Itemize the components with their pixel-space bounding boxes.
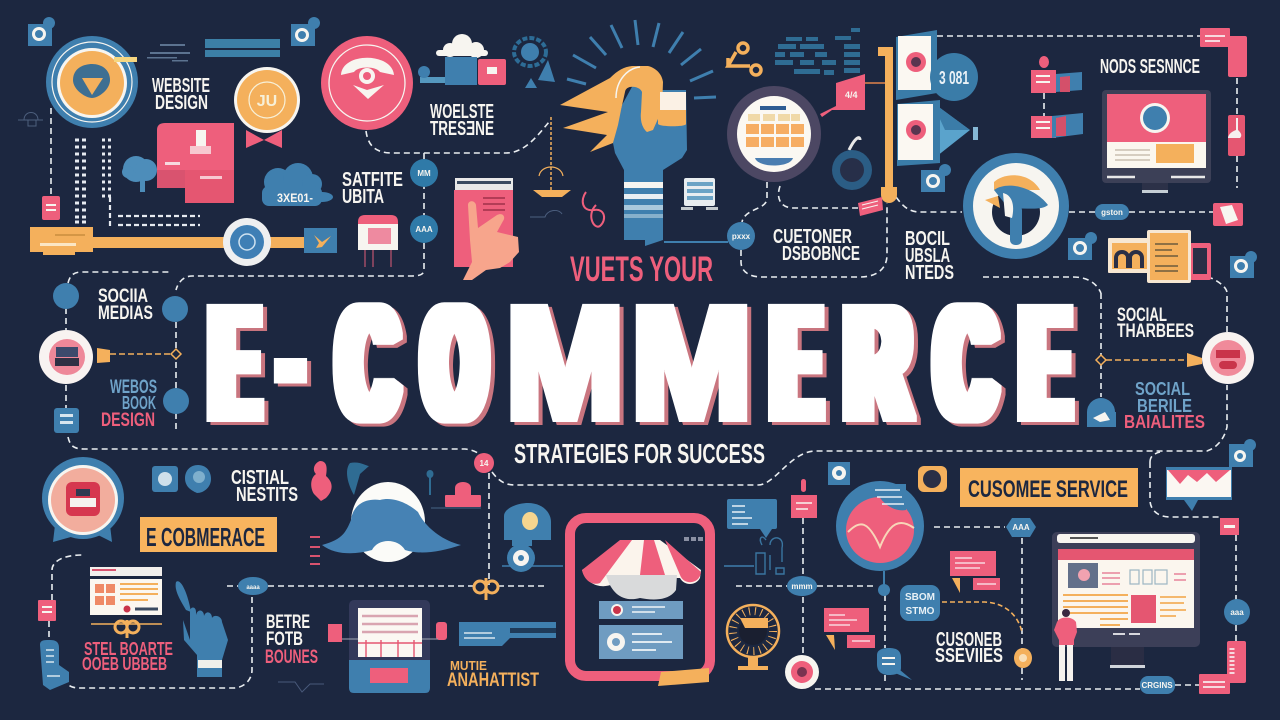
icon: tablet xyxy=(328,600,447,693)
heading: website design xyxy=(152,75,210,114)
blue text card xyxy=(900,585,940,621)
icon: orange badge: JU xyxy=(257,93,277,110)
blue pill node right: AAA xyxy=(1012,523,1030,532)
main title: E xyxy=(212,273,257,454)
small arc icon xyxy=(530,210,562,217)
icon: blue bars xyxy=(205,39,280,57)
heading: woelste tresene xyxy=(430,101,494,140)
main title: E xyxy=(1022,273,1068,454)
heading: betre foth bounes: BOUNES xyxy=(265,647,318,668)
heading: satfite ubita: UBITA xyxy=(342,186,384,208)
icon: blue hand xyxy=(176,581,228,677)
icon: gear and figure xyxy=(514,38,555,88)
icon: round calendar xyxy=(727,86,821,182)
pink tag and blue phone xyxy=(38,600,69,690)
orange text: mutie anahatist: MUTIE xyxy=(450,658,487,673)
icon: pink documents xyxy=(157,123,234,203)
pink text: stel boarte: OOEB UBBEB xyxy=(82,654,167,674)
heading: customer dsbobnce: CUETONER xyxy=(773,226,852,248)
left node: social medias: MEDIAS xyxy=(98,303,153,324)
icon: monitor xyxy=(1102,90,1211,193)
icon pair: brain and drop xyxy=(152,465,211,493)
icon: orange wheel xyxy=(727,605,779,670)
pink message group xyxy=(824,608,875,650)
icon: webcam xyxy=(504,503,551,572)
blue pill xyxy=(1095,204,1129,220)
heading: cusoneb sseviies: CUSONEB xyxy=(936,629,1002,651)
left medallion xyxy=(39,330,110,384)
orange node xyxy=(1014,648,1032,668)
right medallion xyxy=(1096,332,1254,384)
main title: M xyxy=(506,273,624,454)
icon: storefront xyxy=(570,518,710,686)
left text: webos design: WEBOS xyxy=(110,377,157,398)
pink pin tag xyxy=(791,479,817,518)
main title: E xyxy=(773,273,819,454)
heading: woelste tresene: WOELSTE xyxy=(430,101,494,123)
orange label: e commerce: E COBMERACE xyxy=(146,522,265,552)
dot grid xyxy=(75,140,200,226)
heading: satfite ubita xyxy=(342,169,403,208)
orange upright bar xyxy=(878,47,897,203)
pink text: stel boarte xyxy=(82,639,173,674)
node circles: MM xyxy=(417,169,431,178)
heading: website design: WEBSITE xyxy=(152,75,210,97)
blue pill: gston xyxy=(1101,208,1123,217)
main title: C xyxy=(339,272,396,455)
icon: orange robot xyxy=(728,43,761,75)
heading: cistial nestits: CISTIAL xyxy=(231,467,289,489)
blue text card: SBOM xyxy=(905,592,935,603)
pink message group right xyxy=(950,551,1000,593)
blue circle node: aaa xyxy=(1230,608,1244,617)
blue node: pxxx xyxy=(732,232,751,241)
blue pill node: mmm xyxy=(791,582,813,591)
blue pill node right xyxy=(1006,518,1036,537)
subtitle: STRATEGIES FOR SUCCESS xyxy=(514,438,765,469)
heading: vuets your: VUETS YOUR xyxy=(570,250,713,289)
icon: website design ring xyxy=(46,36,138,128)
puzzle icon xyxy=(1229,439,1256,467)
puzzle icon xyxy=(1068,232,1097,260)
icon: cloud store xyxy=(418,34,506,85)
heading: betre foth bounes: BETRE xyxy=(266,612,310,633)
heading: social data nteds xyxy=(905,228,954,284)
blue pill node xyxy=(787,576,817,596)
orange text: mutie anahatist: ANAHATTIST xyxy=(447,670,539,691)
left text: webos design xyxy=(101,349,189,431)
orange knot node xyxy=(474,578,498,600)
bottom left medallion xyxy=(42,457,124,542)
right blue blob xyxy=(1087,398,1116,427)
pink figure and blue figure xyxy=(311,461,369,501)
pie circle xyxy=(836,481,924,571)
icon: blue cloud tree xyxy=(122,156,157,192)
orange round icon xyxy=(918,466,947,492)
pink square xyxy=(1213,203,1243,226)
heading: woelste tresene: TRESƎNE xyxy=(430,118,494,140)
pink tag xyxy=(42,196,60,220)
blue pill bottom right: CRGINS xyxy=(1141,681,1173,690)
node circles: AAA xyxy=(415,225,433,234)
heading: cusoneb sseviies xyxy=(935,629,1003,667)
icon: puzzle top centre xyxy=(291,17,320,46)
pink corner tag xyxy=(1200,28,1247,77)
icon: moon and mountains xyxy=(310,482,461,564)
icon: big ring hammer xyxy=(963,153,1069,259)
blue pill bottom right xyxy=(1140,676,1175,694)
blue text card: STMO xyxy=(906,606,935,617)
right text: social tharbees: THARBEES xyxy=(1117,321,1194,342)
main title: M xyxy=(631,271,752,454)
pink corner tag bottom right xyxy=(1199,641,1246,694)
blue speech panel xyxy=(727,499,784,574)
heading: nods sesnnce: NODS SESNNCE xyxy=(1100,56,1200,78)
heading: social data nteds: BOCIL xyxy=(905,228,950,250)
envelope speech window xyxy=(1166,467,1232,511)
orange label: e commerce xyxy=(140,517,277,552)
icon: orange badge xyxy=(234,67,300,148)
heading: betre foth bounes: FOTB xyxy=(266,629,303,650)
pink node xyxy=(474,453,494,473)
pink flag xyxy=(820,74,865,117)
left text: webos design: DESIGN xyxy=(101,410,155,431)
pink house xyxy=(426,470,481,508)
pink and blue blocks xyxy=(1031,56,1083,138)
heading: betre foth bounes xyxy=(265,612,318,668)
heading: social data nteds: UBSLA xyxy=(905,245,950,267)
right text: social bailites: BAIALITES xyxy=(1124,412,1205,432)
orange label: customer service xyxy=(960,468,1138,507)
heading: website design: DESIGN xyxy=(155,92,208,114)
icon: scale xyxy=(533,117,571,197)
orange text: mutie anahatist xyxy=(447,658,539,691)
heading: social data nteds: NTEDS xyxy=(905,262,954,284)
blue gradient bar xyxy=(459,622,556,646)
blue circle node xyxy=(1224,599,1250,625)
right text: social bailites: BERILE xyxy=(1137,396,1192,416)
main title: R xyxy=(846,272,909,454)
heading: cusoneb sseviies: SSEVIIES xyxy=(935,645,1003,667)
brick pattern xyxy=(775,28,860,75)
pink flag: 4/4 xyxy=(845,90,858,100)
blue bubble xyxy=(877,648,912,680)
puzzle icon xyxy=(921,164,951,192)
small scribble text xyxy=(147,44,190,62)
icon: puzzle top left xyxy=(28,17,55,46)
pink side tag xyxy=(1228,115,1245,156)
blue node xyxy=(727,222,755,250)
icon: phone with hand xyxy=(454,178,519,280)
blue ellipse stat xyxy=(930,53,978,101)
blue ellipse stat: 3 081 xyxy=(939,68,969,88)
main title: - xyxy=(282,265,299,448)
left node: social medias: SOCIIA xyxy=(98,286,148,307)
main title: O xyxy=(425,272,484,454)
right text: social bailites xyxy=(1124,379,1205,432)
window card xyxy=(90,567,162,615)
icon: pink target xyxy=(321,36,413,130)
pink card on stand xyxy=(358,215,398,267)
document stack xyxy=(1108,230,1211,283)
small blue square icon xyxy=(828,462,850,485)
small scribble xyxy=(278,682,324,692)
icon: large monitor with person xyxy=(1052,532,1200,681)
small arc icon xyxy=(18,112,43,126)
pink text: stel boarte: STEL BOARTE xyxy=(84,639,173,659)
pink tag xyxy=(1220,518,1239,535)
puzzle icon xyxy=(1230,251,1257,278)
blue pill node xyxy=(238,577,268,595)
node circles xyxy=(410,159,438,243)
main title: C xyxy=(937,272,994,455)
icon: striped rack xyxy=(681,178,718,210)
heading: satfite ubita: SATFITE xyxy=(342,169,403,191)
left node: social medias xyxy=(53,283,188,324)
left text: webos design: BOOK xyxy=(122,393,156,413)
heading: cistial nestits xyxy=(231,467,298,506)
right text: social bailites: SOCIAL xyxy=(1135,379,1190,399)
heading: customer dsbobnce: DSBOBNCE xyxy=(782,243,860,265)
display panels with prism xyxy=(896,30,978,166)
icon: orange knot xyxy=(91,620,162,638)
squiggle icon xyxy=(583,192,604,227)
bottom medallion xyxy=(785,655,819,689)
heading: customer dsbobnce xyxy=(773,226,860,265)
main title xyxy=(212,265,1068,455)
blue pill node: aaaa xyxy=(246,585,260,591)
cloud label: 3XE01- xyxy=(277,191,313,205)
orange label: customer service: CUSOMEE SERVICE xyxy=(968,476,1128,503)
blue drop node xyxy=(878,584,890,596)
right text: social tharbees: SOCIAL xyxy=(1117,305,1167,326)
icon: padlock xyxy=(832,138,872,190)
cloud label xyxy=(262,163,333,206)
icon: light bulb hand xyxy=(560,20,716,246)
person xyxy=(1054,609,1077,681)
pink tag xyxy=(858,197,883,216)
right text: social tharbees xyxy=(1117,305,1194,342)
pink node: 14 xyxy=(480,459,489,468)
heading: cistial nestits: NESTITS xyxy=(236,484,298,506)
left puzzle xyxy=(54,408,79,433)
orange bar and medallion xyxy=(30,218,337,266)
